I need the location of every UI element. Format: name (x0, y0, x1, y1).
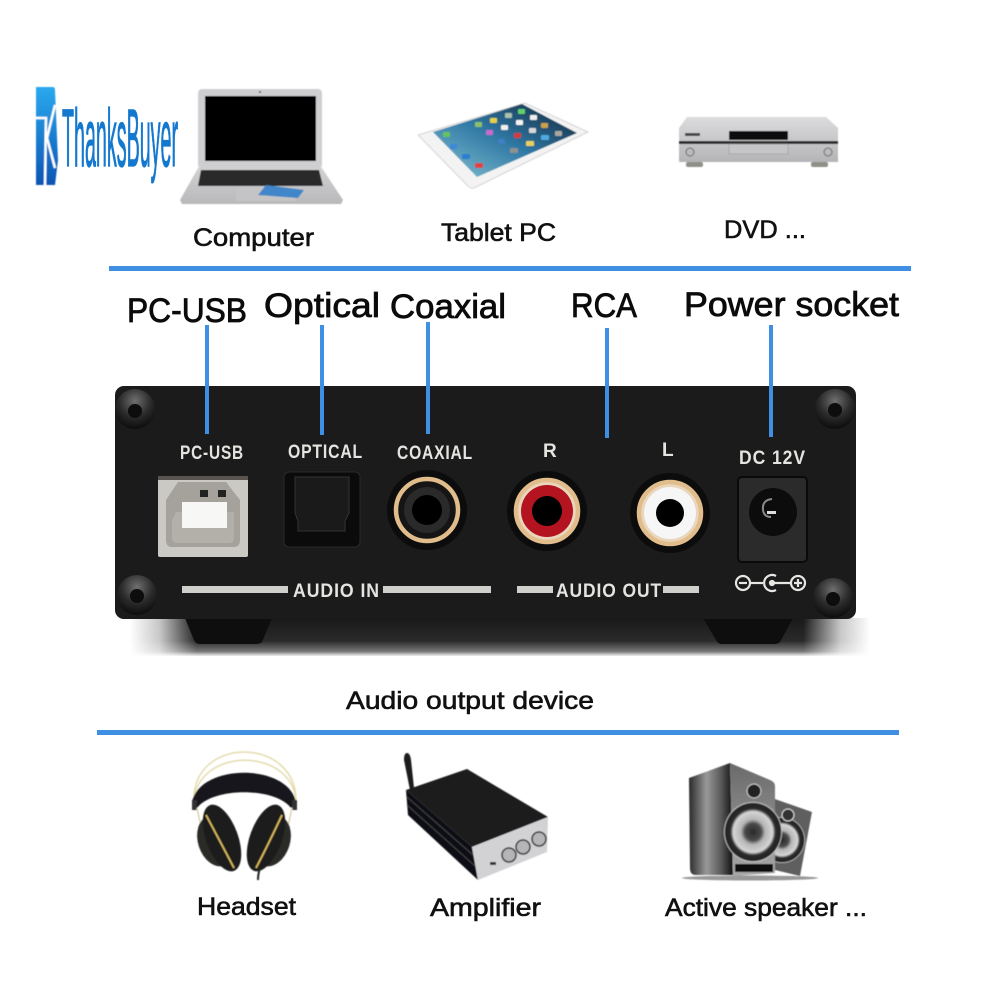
screw top left (115, 389, 155, 429)
port label R: R (543, 441, 558, 462)
optical port (284, 472, 360, 547)
AUDIO OUT bracket: AUDIO OUT (556, 581, 662, 602)
divider: bottom blue line (97, 730, 899, 735)
icon: active speakers (682, 763, 818, 880)
AUDIO OUT bracket (517, 581, 699, 602)
port label PC-USB: PC-USB (180, 443, 244, 464)
icon: headset (191, 752, 297, 880)
connector line: Coaxial (426, 322, 430, 434)
logo mark (36, 87, 58, 185)
label: Amplifier: Amplifier (430, 894, 541, 922)
AUDIO IN bracket (182, 581, 491, 602)
port label DC 12V: DC 12V (739, 448, 806, 469)
logo: ThanksBuyer (36, 87, 178, 185)
icon: tablet PC (418, 103, 588, 188)
divider: top blue line (109, 266, 911, 271)
label: DVD: DVD ... (724, 216, 806, 244)
screw top right (815, 389, 855, 429)
icon: laptop computer (180, 89, 343, 204)
label: Tablet PC: Tablet PC (441, 219, 556, 247)
RCA jack R red (507, 471, 587, 551)
connector line: Power socket (769, 325, 773, 437)
label: Computer: Computer (193, 224, 314, 252)
device body (115, 386, 856, 619)
AUDIO IN bracket: AUDIO IN (293, 581, 380, 602)
label: Active speaker: Active speaker ... (665, 894, 867, 922)
screw bottom left (117, 575, 157, 615)
heading: RCA: RCA (571, 287, 637, 325)
heading: Power socket: Power socket (684, 286, 900, 324)
label: Audio output device: Audio output device (346, 687, 594, 715)
connector line: Optical (320, 325, 324, 435)
label: Headset: Headset (197, 893, 296, 921)
RCA jack L white (630, 473, 710, 553)
icon: amplifier (404, 753, 548, 880)
text: ThanksBuyer (62, 93, 178, 184)
DC polarity symbol (736, 575, 805, 591)
connector line: PC-USB (205, 325, 209, 434)
connector line: RCA (605, 328, 609, 438)
screw bottom right (813, 578, 853, 618)
device feet and shadow (130, 618, 870, 656)
port label L: L (662, 440, 675, 461)
panel: device rear view (115, 386, 870, 656)
port label OPTICAL: OPTICAL (288, 442, 363, 463)
heading: PC-USB: PC-USB (127, 292, 247, 330)
heading: Coaxial: Coaxial (390, 288, 506, 326)
icon: DVD player (679, 117, 838, 167)
port label COAXIAL: COAXIAL (397, 443, 473, 464)
DC power jack (738, 477, 807, 562)
coaxial RCA jack (387, 470, 467, 550)
heading: Optical: Optical (264, 287, 380, 325)
USB-B port (158, 476, 248, 557)
